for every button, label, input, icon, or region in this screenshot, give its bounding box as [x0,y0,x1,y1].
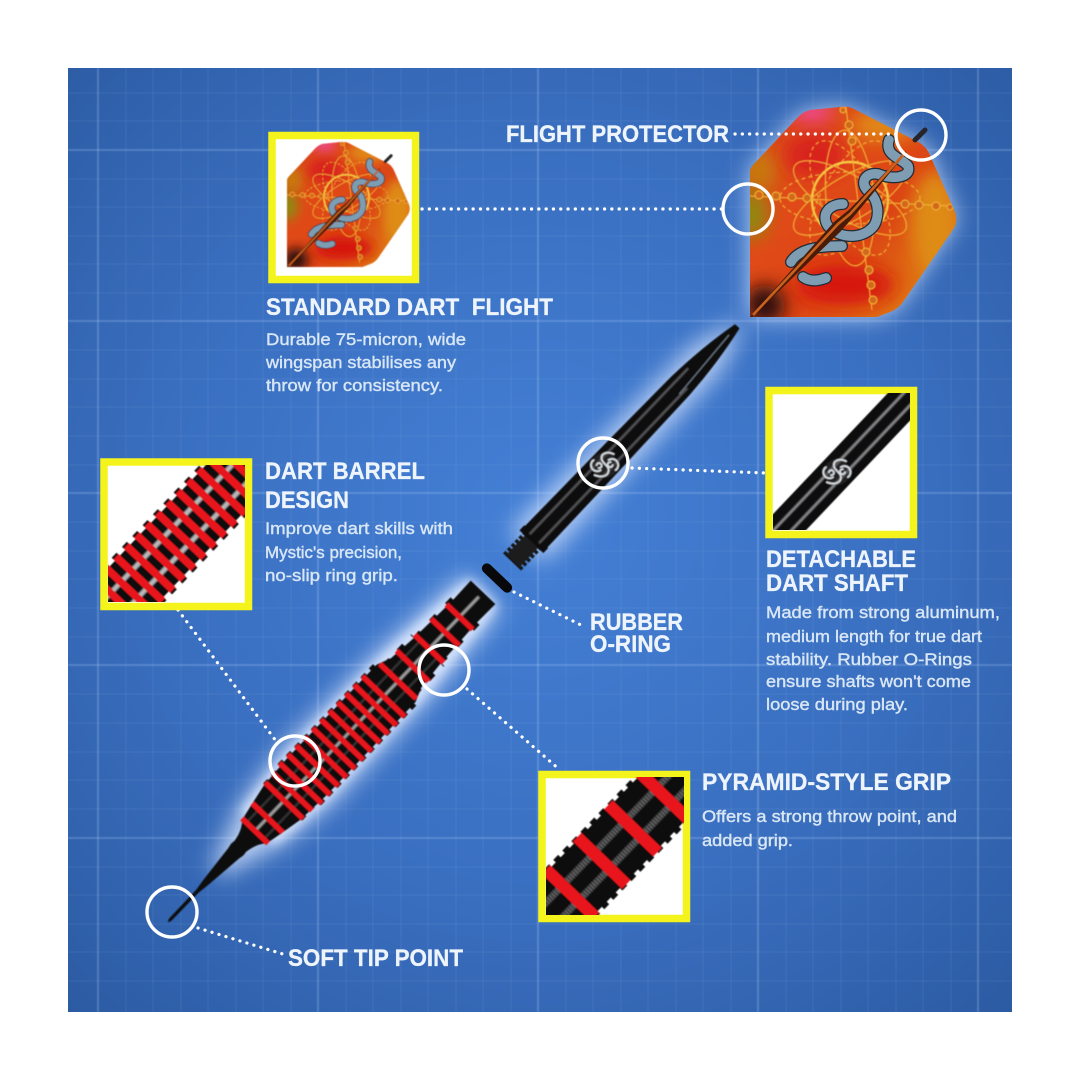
text block: dart barrel design: DART BARREL [265,458,425,485]
heading: flight protector: FLIGHT PROTECTOR [506,121,729,148]
text block: dart barrel design [265,458,453,585]
callout: dotted leader lines [178,134,897,955]
text block: detachable dart shaft: stability. Rubber O-Rings [766,650,972,669]
flight glow [750,107,957,317]
callout: detail rings [147,110,946,937]
text block: detachable dart shaft: loose during play. [766,695,908,714]
dart glow [190,301,764,896]
text block: detachable dart shaft: medium length for true dart [766,627,982,646]
label: rubber O-ring: RUBBER [590,609,683,636]
panel: blueprint background [68,68,1012,1012]
text block: dart barrel design: DESIGN [265,487,349,514]
label: rubber O-ring [590,609,683,658]
text block: detachable dart shaft: DART SHAFT [766,570,908,597]
label: rubber O-ring: O-RING [590,631,671,658]
text block: standard dart flight: wingspan stabilises any [265,353,457,372]
text block: detachable dart shaft: Made from strong aluminum, [766,603,1000,622]
text block: detachable dart shaft: ensure shafts won't come [766,672,971,691]
panel: shaft thumbnail [765,386,918,538]
text block: pyramid-style grip: PYRAMID-STYLE GRIP [702,769,951,796]
label: soft tip point: SOFT TIP POINT [288,945,463,972]
text block: standard dart flight: throw for consistency. [266,376,443,395]
panel: barrel thumbnail [100,458,252,610]
text block: standard dart flight: Durable 75-micron, wide [266,330,466,349]
rubber O-ring [480,561,514,595]
text block: detachable dart shaft [766,546,1000,714]
text block: standard dart flight [265,294,553,395]
text block: pyramid-style grip: Offers a strong throw point, and [702,807,957,826]
text block: dart barrel design: no-slip ring grip. [265,566,398,585]
dart: soft tip and barrel [147,572,504,942]
text block: dart barrel design: Mystic's precision, [265,543,402,562]
text block: pyramid-style grip [702,769,957,850]
icon: large dart flight [736,100,959,325]
dart shaft [498,313,751,575]
text block: standard dart flight: STANDARD DART FLIGHT [266,294,553,321]
panel: standard flight thumbnail [272,136,416,280]
text block: dart barrel design: Improve dart skills with [265,519,453,538]
text block: pyramid-style grip: added grip. [702,831,793,850]
text block: detachable dart shaft: DETACHABLE [766,546,916,573]
panel: grip thumbnail [538,770,690,922]
